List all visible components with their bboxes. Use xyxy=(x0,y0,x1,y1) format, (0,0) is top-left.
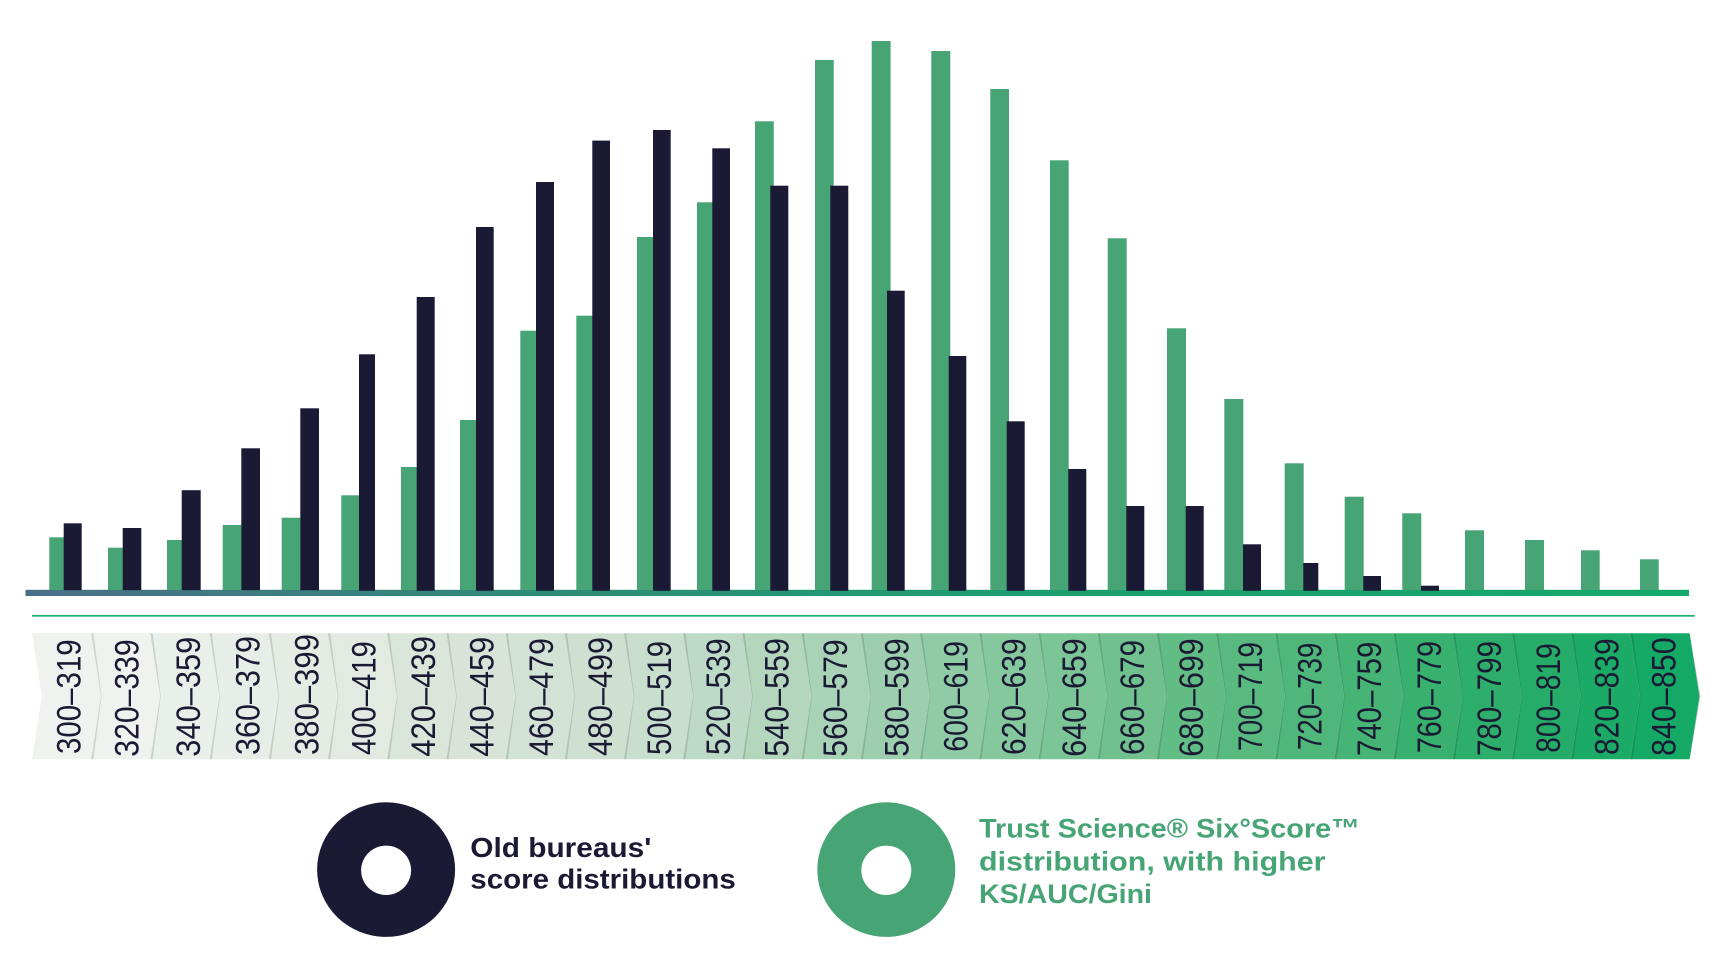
bars: 580–599 xyxy=(872,41,905,591)
chevron: 520–539 xyxy=(683,633,752,759)
legend label: old bureaus: score distributions xyxy=(470,863,736,894)
bars: 480–499 xyxy=(576,141,610,591)
bars: 620–639 xyxy=(990,89,1025,591)
chevron: 520–539: 520–539 xyxy=(700,638,738,755)
chevron: 340–359 xyxy=(150,633,219,759)
chevron: 360–379 xyxy=(210,633,279,759)
end shadow of last chevron xyxy=(1690,633,1701,759)
chevron: 300–319 xyxy=(32,633,101,759)
chevron: 600–619 xyxy=(920,633,989,759)
chevron: 800–819: 800–819 xyxy=(1530,643,1568,753)
bars: 360–379 xyxy=(223,448,260,590)
chevron: 480–499 xyxy=(565,633,634,759)
chart baseline xyxy=(26,590,1689,596)
chevron: 680–699: 680–699 xyxy=(1173,638,1211,757)
chevron: 580–599 xyxy=(861,633,930,759)
chevron: 380–399 xyxy=(269,633,338,759)
chevron: 320–339 xyxy=(91,633,160,759)
chevron: 420–439 xyxy=(387,633,456,759)
bar chart: score distributions xyxy=(49,41,1659,591)
bar: 780–799 xyxy=(1465,530,1484,590)
chevron: 400–419 xyxy=(328,633,397,759)
chevron: 600–619: 600–619 xyxy=(938,641,976,752)
bars: 320–339 xyxy=(108,528,141,590)
legend label: Trust Science: KS/AUC/Gini xyxy=(979,879,1152,909)
legend: old bureaus xyxy=(317,802,736,937)
chevron: 700–719 xyxy=(1216,633,1285,759)
chevron: 820–839 xyxy=(1571,633,1640,759)
bars: 520–539 xyxy=(697,148,730,591)
bars: 600–619 xyxy=(931,51,966,591)
bars: 400–419 xyxy=(341,354,375,591)
chevron: 680–699 xyxy=(1157,633,1226,759)
bars: 660–679 xyxy=(1108,238,1144,591)
bars: 680–699 xyxy=(1167,328,1204,591)
chevron: 840–850 xyxy=(1630,633,1699,759)
bars: 560–579 xyxy=(815,60,848,591)
chevron: 840–850: 840–850 xyxy=(1646,637,1684,756)
chevron: 500–519: 500–519 xyxy=(641,641,679,755)
bars: 300–319 xyxy=(49,523,82,590)
legend label: Trust Science: distribution, with higher xyxy=(979,846,1326,876)
chevron: 660–679 xyxy=(1098,633,1167,759)
bar: 840–850 xyxy=(1640,559,1659,590)
chevron: 460–479: 460–479 xyxy=(523,638,561,756)
bars: 500–519 xyxy=(637,130,671,591)
chevron: 620–639 xyxy=(979,633,1048,759)
chevron: 340–359: 340–359 xyxy=(170,637,208,757)
chevron: 740–759: 740–759 xyxy=(1351,642,1389,756)
chevron: 560–579: 560–579 xyxy=(817,639,855,757)
chevron: 720–739: 720–739 xyxy=(1292,643,1330,750)
chevron: 640–659: 640–659 xyxy=(1056,638,1094,757)
chevron: 300–319: 300–319 xyxy=(51,639,89,754)
legend label: Trust Science: Trust Science® Six°Score™ xyxy=(979,813,1360,843)
chevron: 740–759 xyxy=(1334,633,1403,759)
chevron: 320–339: 320–339 xyxy=(109,639,147,757)
chevron: 620–639: 620–639 xyxy=(996,638,1034,755)
chevron: 760–779 xyxy=(1394,633,1463,759)
chevron: 440–459 xyxy=(446,633,515,759)
chevron: 640–659 xyxy=(1038,633,1107,759)
chevron: 540–559: 540–559 xyxy=(758,638,796,757)
chevron: 380–399: 380–399 xyxy=(289,634,327,755)
chevron: 540–559 xyxy=(742,633,811,759)
chevron: 760–779: 760–779 xyxy=(1411,641,1449,753)
chevron: 360–379: 360–379 xyxy=(229,636,267,755)
bars: 380–399 xyxy=(282,408,319,590)
chevron: 820–839: 820–839 xyxy=(1588,638,1626,755)
chevron: 800–819 xyxy=(1512,633,1581,759)
bars: 340–359 xyxy=(167,490,201,590)
chevron: 400–419: 400–419 xyxy=(346,641,384,755)
chevron: 660–679: 660–679 xyxy=(1114,640,1152,755)
bars: 700–719 xyxy=(1224,399,1261,591)
chevron: 780–799: 780–799 xyxy=(1471,641,1509,756)
bars: 460–479 xyxy=(520,182,554,591)
chevron: 460–479 xyxy=(506,633,575,759)
bars: 760–779 xyxy=(1402,513,1439,591)
bar: 800–819 xyxy=(1525,540,1544,590)
score range chevron band xyxy=(32,633,1701,759)
chevron: 480–499: 480–499 xyxy=(582,637,620,756)
bars: 740–759 xyxy=(1345,497,1381,591)
chevron: 700–719: 700–719 xyxy=(1232,642,1270,751)
bars: 720–739 xyxy=(1285,463,1318,591)
chevron: 500–519 xyxy=(624,633,693,759)
bars: 420–439 xyxy=(401,297,435,591)
bars: 640–659 xyxy=(1050,160,1086,591)
legend label: old bureaus: Old bureaus' xyxy=(470,832,651,863)
chevron: 420–439: 420–439 xyxy=(405,636,443,757)
chevron: 580–599: 580–599 xyxy=(878,638,916,757)
bar: 820–839 xyxy=(1581,550,1600,590)
chevron: 780–799 xyxy=(1453,633,1522,759)
legend: Trust Science xyxy=(817,802,1360,937)
chevron: 440–459: 440–459 xyxy=(463,637,501,757)
chevron: 720–739 xyxy=(1275,633,1344,759)
chevron: 560–579 xyxy=(802,633,871,759)
bars: 540–559 xyxy=(755,121,788,591)
icon: dark ring xyxy=(317,802,455,937)
icon: green ring xyxy=(817,802,955,937)
axis divider line xyxy=(32,615,1695,617)
bars: 440–459 xyxy=(460,227,494,591)
